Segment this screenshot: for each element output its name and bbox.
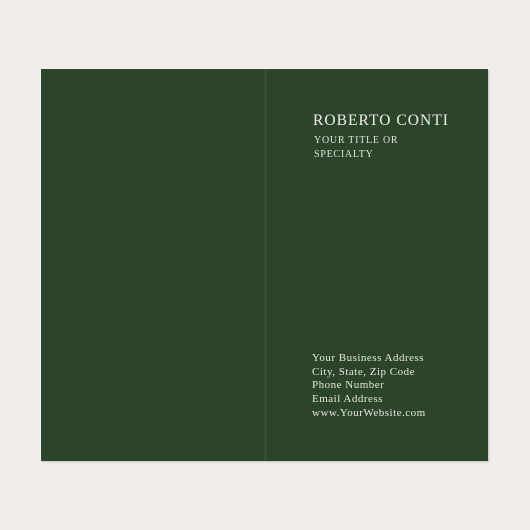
contact details: Your Business Address	[312, 352, 424, 364]
contact details: www.YourWebsite.com	[312, 407, 426, 419]
name heading: ROBERTO CONTI	[313, 112, 449, 129]
contact details: Phone Number	[312, 379, 384, 391]
contact details	[312, 352, 426, 419]
job title: SPECIALTY	[314, 149, 374, 160]
job title	[314, 135, 398, 160]
contact details: City, State, Zip Code	[312, 366, 415, 378]
contact details: Email Address	[312, 393, 383, 405]
panel: business card	[41, 69, 488, 461]
fold line	[264, 69, 267, 461]
job title: YOUR TITLE OR	[314, 135, 398, 146]
